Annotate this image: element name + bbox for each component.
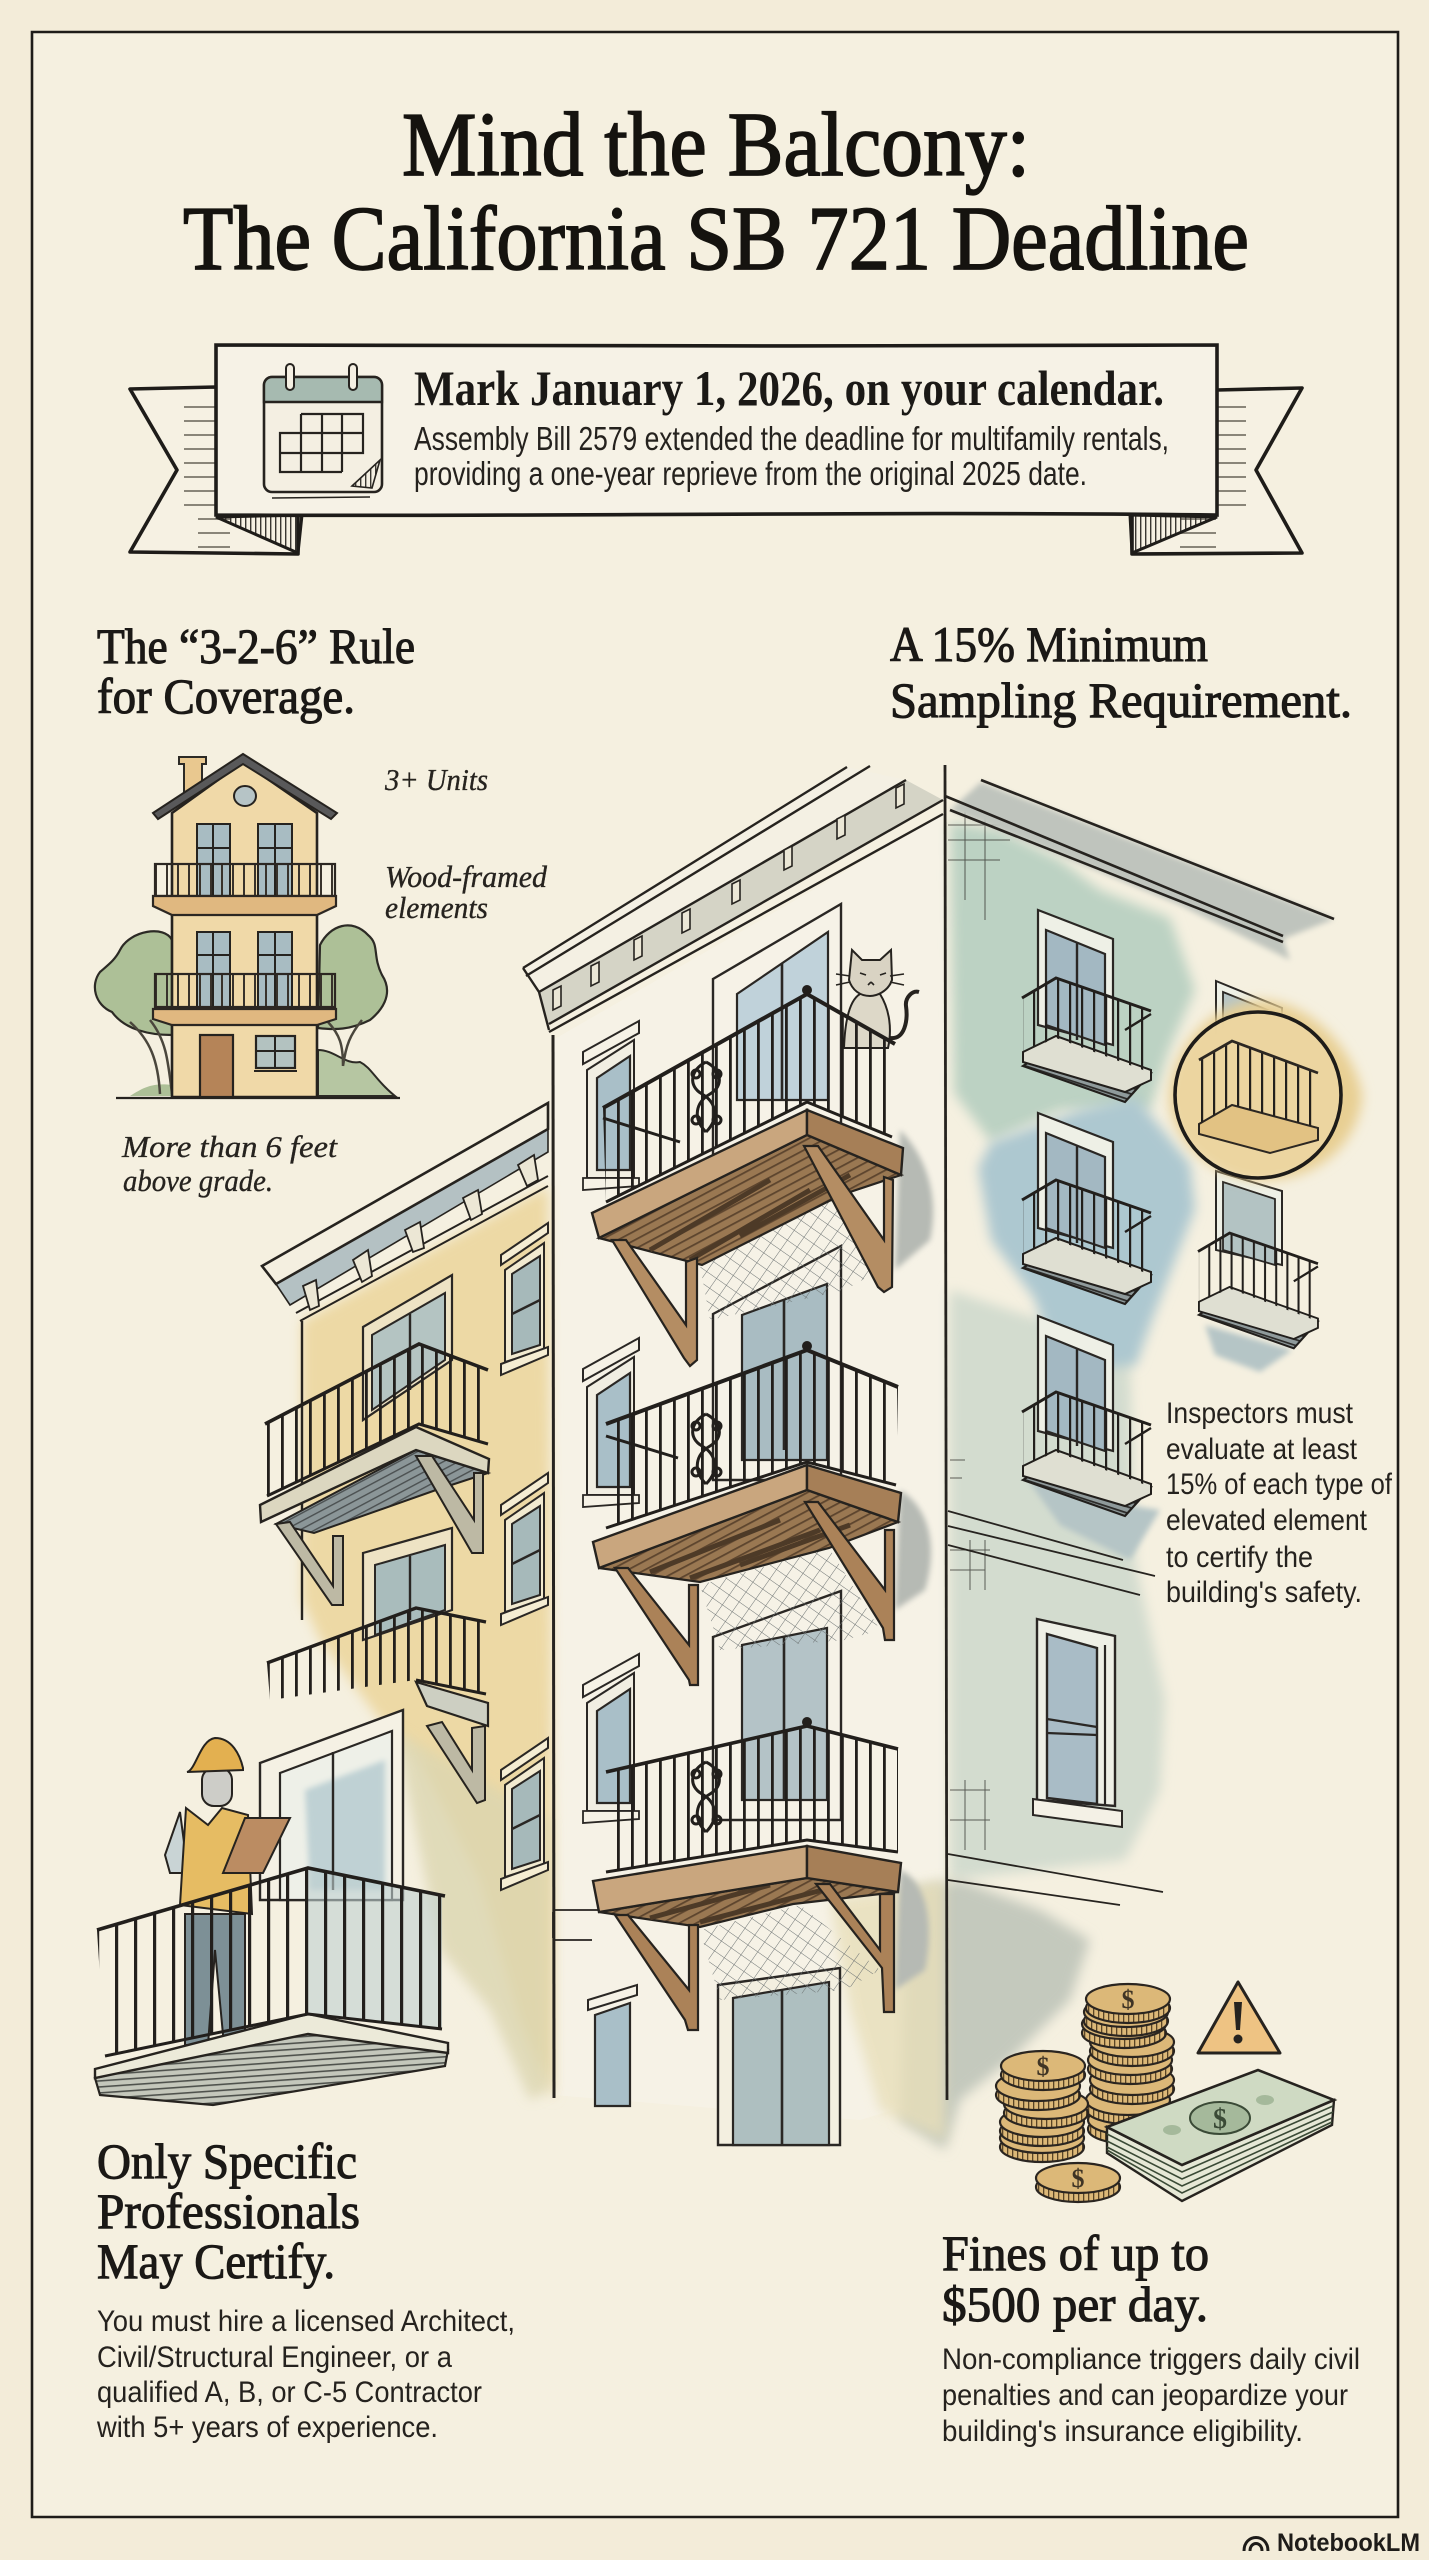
ribbon main panel [216, 345, 1217, 515]
balcony cast shadows [895, 1130, 933, 1990]
body: certify [96, 2305, 515, 2444]
body: certify: qualified A, B, or C-5 Contractor [97, 2376, 482, 2409]
balcony yellow lower [267, 1608, 488, 1803]
tall coin stack: $ [1122, 1985, 1134, 2014]
NotebookLM mark: NotebookLM [1277, 2529, 1420, 2557]
banknote stack: $ [1213, 2104, 1227, 2135]
heading: fines: Fines of up to [942, 2225, 1209, 2281]
house balcony upper [153, 864, 336, 915]
upper door window [363, 1275, 452, 1420]
highlighted balcony callout [1170, 1000, 1362, 1180]
wash: shadow under lower right balconies [1028, 1325, 1292, 1560]
right wall tall window [1033, 1619, 1122, 1827]
body: fines [942, 2343, 1360, 2448]
heading: certify: May Certify. [97, 2233, 335, 2289]
bottom wood balcony [593, 1717, 901, 2030]
short coin stack [996, 2051, 1088, 2162]
heading: 3-2-6 rule: for Coverage. [97, 668, 355, 724]
title: Mind the Balcony: [402, 94, 1030, 195]
body: fines: Non-compliance triggers daily civil [942, 2343, 1360, 2376]
inspectors text: 15% of each type of [1166, 1468, 1393, 1501]
icon: NotebookLM [1244, 2538, 1268, 2551]
wash: right wall blue [978, 1097, 1195, 1370]
heading: 3-2-6 rule: The “3-2-6” Rule [97, 618, 415, 674]
banner body text: Assembly Bill 2579 extended the deadline for multifamily rentals, [414, 420, 1169, 457]
small house illustration [95, 754, 400, 1098]
heading: 15% sampling: Sampling Requirement. [890, 672, 1352, 728]
door [200, 1035, 233, 1097]
inspectors text: evaluate at least [1166, 1433, 1358, 1466]
upper windows [197, 824, 292, 1008]
middle wood balcony [593, 1341, 901, 1685]
note: more than 6 feet: More than 6 feet [121, 1129, 338, 1164]
heading: fines: $500 per day. [942, 2276, 1208, 2332]
yellow building side windows [501, 1223, 548, 1890]
house walls [172, 762, 317, 1097]
banner body text [414, 420, 1169, 492]
note: wood-framed elements: elements [385, 890, 488, 925]
inspector balcony railing [97, 1868, 445, 2056]
inspectors text [1166, 1397, 1393, 1609]
loose coin [1036, 2163, 1120, 2202]
wash: ochre lower [395, 1730, 550, 2100]
wash: main left wall [553, 815, 943, 2120]
yellow left building [260, 1103, 548, 1890]
house balcony lower [153, 974, 336, 1025]
inspector figure [165, 1738, 290, 2045]
heading: fines [942, 2225, 1209, 2332]
ground floor window [254, 1036, 297, 1071]
big window third [713, 1591, 841, 1820]
left roof cornice [523, 766, 943, 1032]
section: certify [96, 2133, 515, 2444]
cat on top balcony [836, 950, 919, 1048]
heading: certify [97, 2133, 360, 2289]
wash: right wall green [950, 822, 1195, 1142]
title [183, 94, 1249, 289]
note: more than 6 feet: above grade. [123, 1163, 273, 1198]
right wall balconies [1022, 978, 1318, 1516]
short coin stack: $ [1036, 2052, 1050, 2081]
note: 3+ units: 3+ Units [384, 762, 488, 797]
note: more than 6 feet [121, 1129, 338, 1198]
watercolor washes [302, 815, 1292, 2150]
wash: yellow building [302, 1186, 553, 2100]
trees and shrubs [95, 925, 395, 1096]
top wood balcony [592, 985, 903, 1366]
fines illustration [996, 1982, 1334, 2202]
big window upper [713, 904, 841, 1200]
wash: wall base tint [830, 1880, 945, 2140]
heading: 3-2-6 rule [97, 618, 415, 724]
wash: right wall base [950, 1290, 1165, 1880]
inspectors text: Inspectors must [1166, 1397, 1354, 1430]
loose coin: $ [1072, 2164, 1084, 2193]
main corner building [410, 765, 1393, 2145]
far window lower [1216, 1171, 1282, 1265]
roof cornice [262, 1103, 548, 1620]
heading: 15% sampling: A 15% Minimum [890, 616, 1208, 672]
right roof cornice [945, 780, 1334, 960]
ribbon left tail [130, 387, 302, 554]
heading: certify: Professionals [97, 2183, 360, 2239]
far window upper [1216, 981, 1282, 1060]
warning triangle [1198, 1982, 1280, 2053]
body: certify: You must hire a licensed Architect, [97, 2305, 515, 2338]
note: wood-framed elements [385, 859, 547, 925]
heading: certify: Only Specific [97, 2133, 357, 2189]
section: fines [942, 2225, 1360, 2448]
body: certify: with 5+ years of experience. [96, 2411, 438, 2444]
ribbon right tail [1130, 388, 1302, 554]
big window bottom [718, 1968, 840, 2145]
left wall small windows [583, 1021, 639, 2106]
left wall edge and corner lines [410, 765, 1163, 2100]
lower door window [363, 1528, 452, 1640]
body: fines: building's insurance eligibility. [942, 2415, 1303, 2448]
body: fines: penalties and can jeopardize your [942, 2379, 1348, 2412]
heading: 15% sampling [890, 616, 1352, 728]
inspectors text: building's safety. [1166, 1576, 1362, 1609]
banner body text: providing a one-year reprieve from the original 2025 date. [414, 455, 1087, 492]
banknote stack [1107, 2070, 1334, 2201]
sliding door behind inspector [260, 1710, 403, 1900]
banner heading: Mark January 1, 2026, on your calendar. [414, 360, 1164, 416]
chimney [179, 757, 206, 798]
inspector balcony deck [95, 2014, 448, 2105]
crosshatch under balconies [700, 1195, 880, 2000]
balcony yellow upper [260, 1344, 489, 1605]
inspectors text: elevated element [1166, 1504, 1368, 1537]
title: The California SB 721 Deadline [183, 188, 1249, 289]
tall coin stack [1082, 1984, 1174, 2144]
right wall windows [1038, 910, 1282, 1451]
note: wood-framed elements: Wood-framed [385, 859, 547, 894]
wash: under-building grey [900, 1880, 1090, 2150]
deadline ribbon banner [130, 345, 1302, 554]
body: certify: Civil/Structural Engineer, or a [97, 2341, 452, 2374]
big window second [713, 1246, 841, 1480]
inspectors text: to certify the [1166, 1541, 1313, 1574]
roof [153, 754, 337, 819]
round attic window [234, 786, 256, 806]
icon: calendar [264, 364, 382, 498]
inspector balcony scene [95, 1710, 448, 2105]
